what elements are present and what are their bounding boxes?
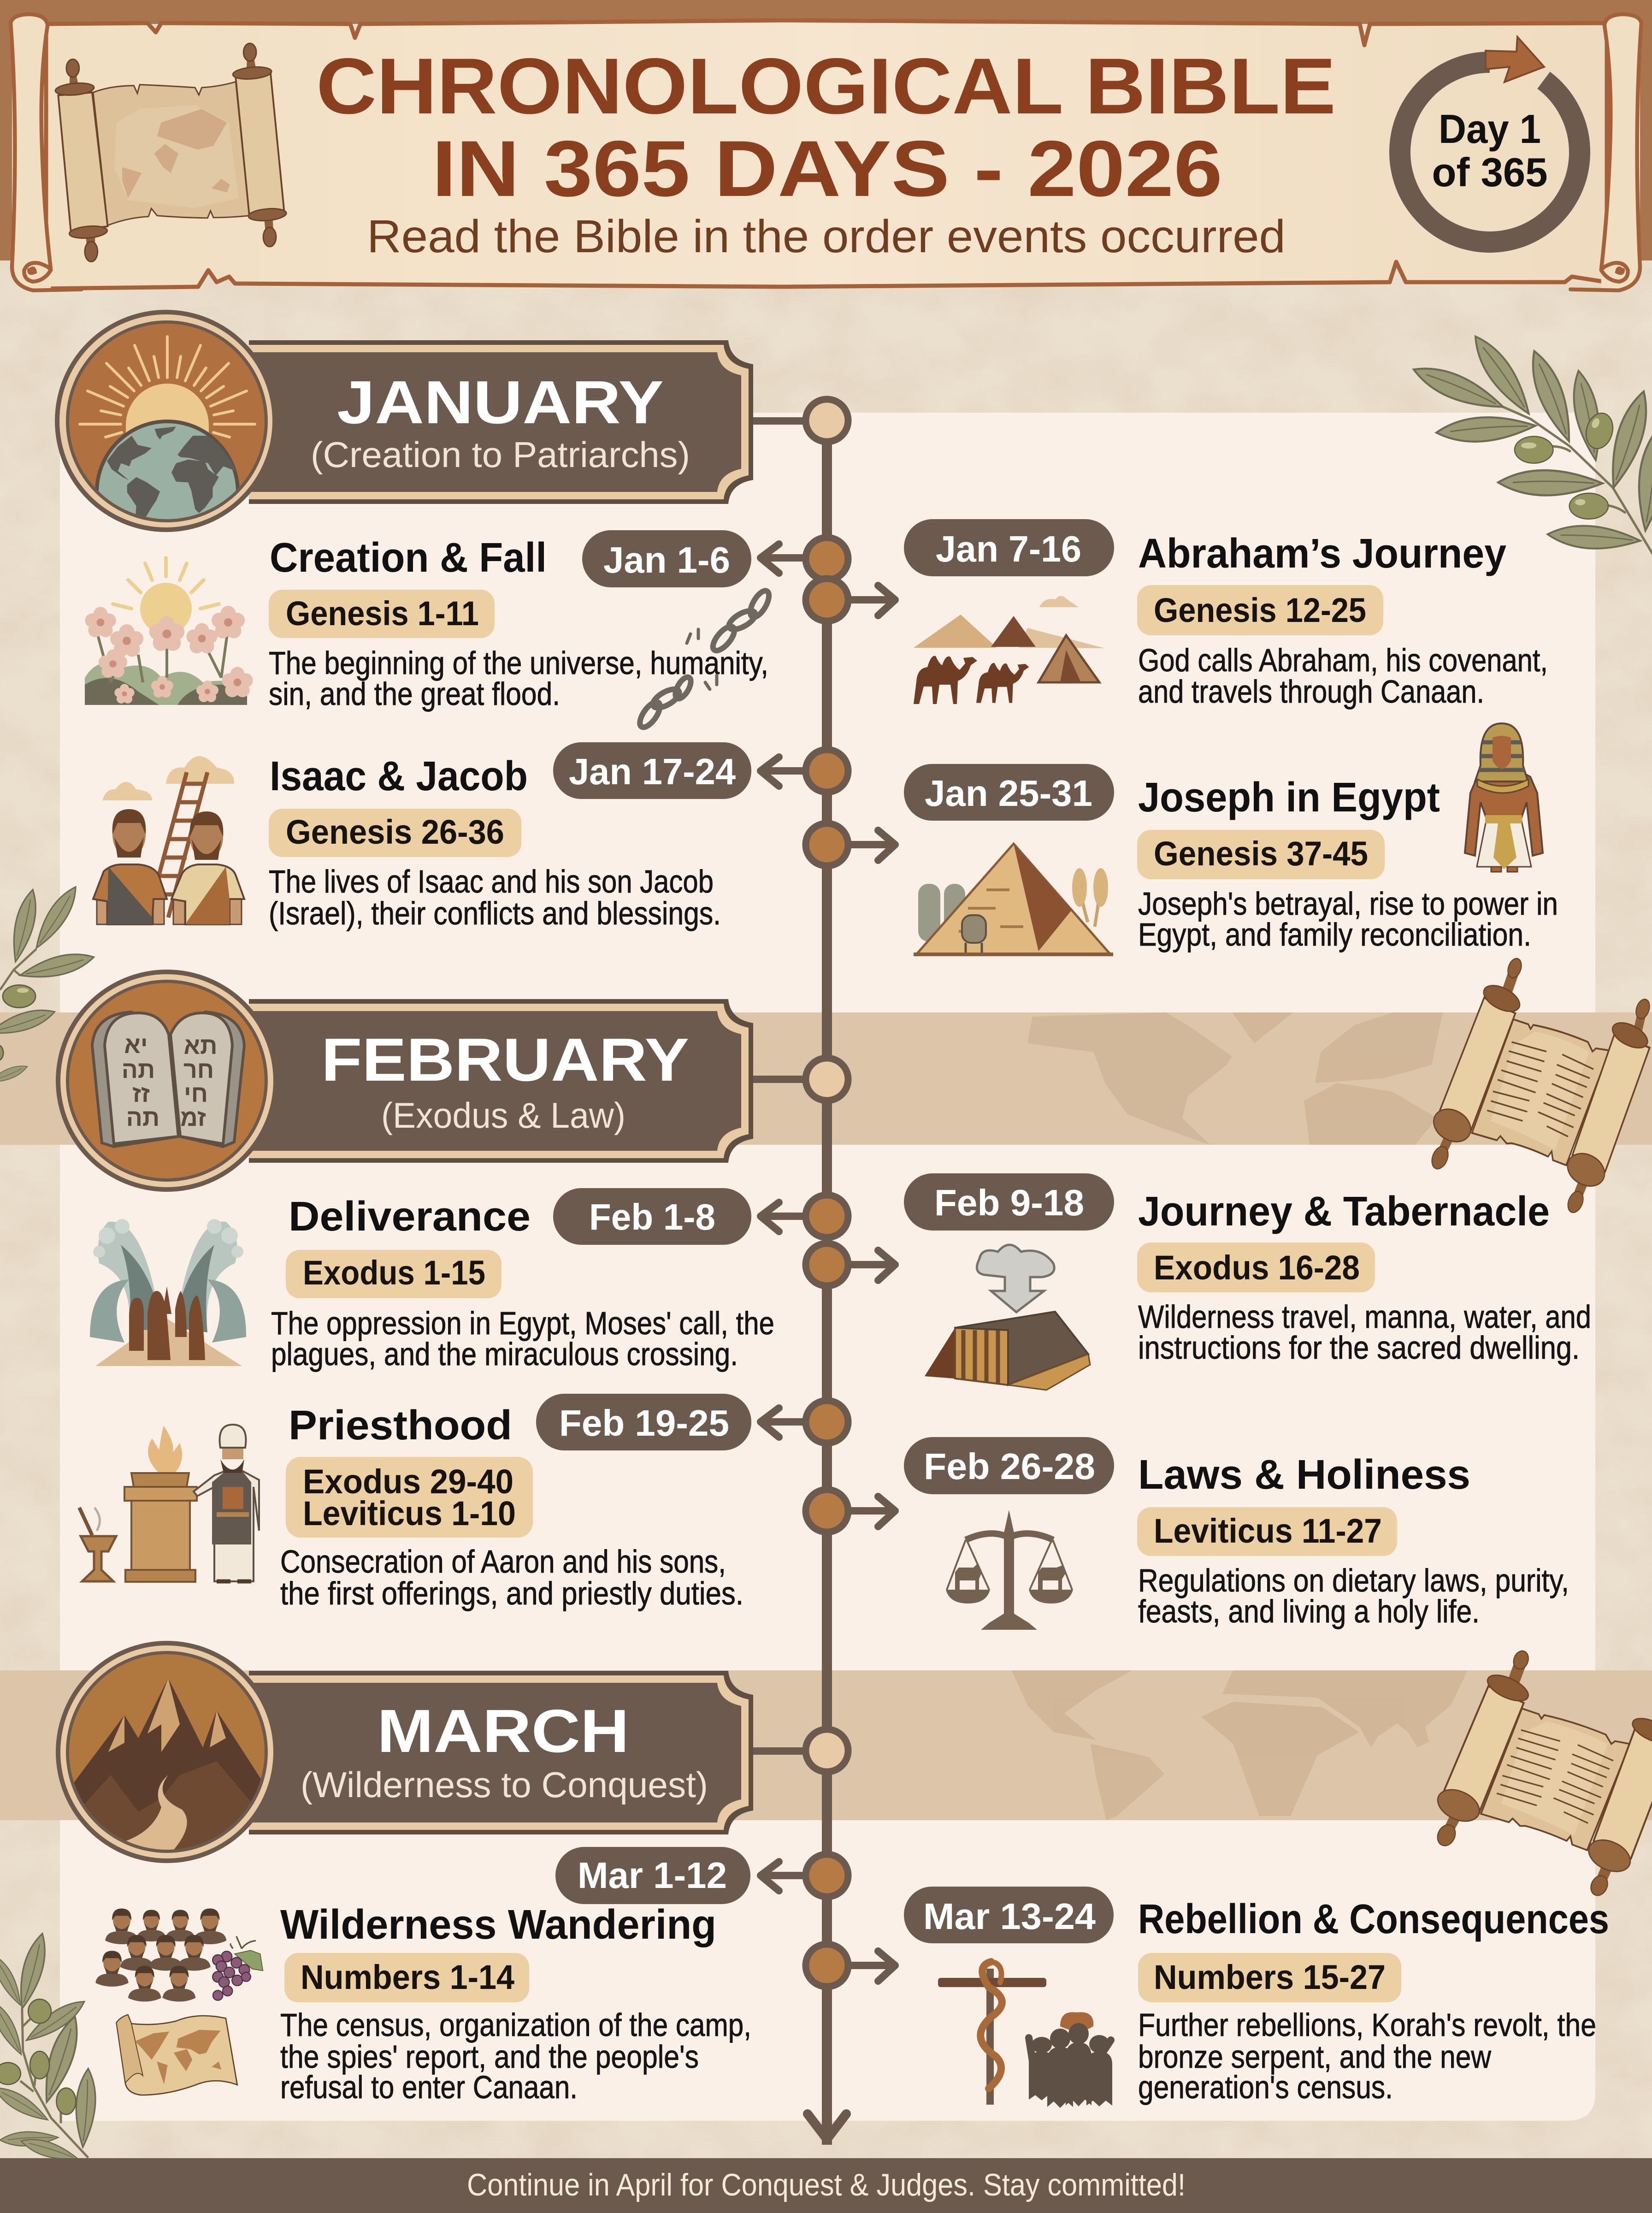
icon: pyramid and granaries [914, 844, 1113, 954]
description: (Israel), their conflicts and blessings. [269, 895, 721, 931]
description [269, 864, 721, 931]
icon: mountains medallion [56, 1641, 278, 1863]
description: The census, organization of the camp, [280, 2007, 751, 2043]
arrow to timeline [761, 750, 848, 792]
heading: Journey & Tabernacle [1138, 1189, 1550, 1235]
date pill: Feb 19-25 [559, 1402, 729, 1444]
icon: parting red sea [90, 1219, 246, 1366]
arrow to timeline [761, 538, 848, 580]
arrow to timeline [761, 1401, 848, 1443]
heading: Laws & Holiness [1138, 1452, 1470, 1498]
description: bronze serpent, and the new [1138, 2039, 1491, 2075]
entry: journey and tabernacle [806, 1173, 1591, 1390]
scripture pill: Exodus 1-15 [303, 1254, 485, 1292]
icon: world map parchment [117, 2015, 237, 2095]
description: Egypt, and family reconciliation. [1138, 917, 1531, 953]
entry: wilderness wandering [95, 1847, 848, 2105]
arrow from timeline [806, 1243, 895, 1286]
date pill [555, 1847, 750, 1904]
date pill [536, 1394, 751, 1450]
plaque [249, 999, 753, 1163]
description: the first offerings, and priestly duties. [280, 1575, 743, 1611]
header scroll banner [0, 0, 1652, 290]
description: Further rebellions, Korah's revolt, the [1138, 2007, 1596, 2043]
entry: isaac and jacob [93, 742, 848, 931]
scripture pill: Leviticus 1-10 [303, 1494, 516, 1533]
icon: balance scales [946, 1510, 1073, 1630]
description: The lives of Isaac and his son Jacob [269, 864, 714, 899]
description: sin, and the great flood. [269, 676, 560, 712]
title: IN 365 DAYS - 2026 [432, 124, 1222, 213]
date pill: Mar 13-24 [923, 1896, 1096, 1937]
day counter: of 365 [1432, 149, 1548, 195]
date pill [904, 1173, 1114, 1231]
description: Consecration of Aaron and his sons, [280, 1544, 726, 1580]
march map band [0, 1670, 1652, 1820]
icon: people and grapes [95, 1908, 263, 2001]
arrow from timeline [806, 1490, 895, 1532]
footer bar [0, 2158, 1652, 2213]
description [280, 2007, 751, 2105]
heading: Joseph in Egypt [1138, 775, 1440, 821]
february header [56, 970, 848, 1192]
date pill: Feb 26-28 [924, 1446, 1095, 1487]
month name: FEBRUARY [321, 1026, 689, 1094]
scripture pill: Genesis 37-45 [1154, 834, 1368, 873]
entry: joseph in egypt [806, 723, 1558, 954]
scripture pill [286, 1457, 533, 1538]
month name: MARCH [377, 1697, 629, 1765]
icon: altar and high priest [79, 1425, 259, 1582]
date pill: Jan 17-24 [569, 751, 736, 792]
olive branch bottom left [0, 1931, 98, 2166]
icon: stone tablets medallion: תה [126, 1105, 159, 1131]
date pill [904, 519, 1114, 576]
icon: rebellious crowd [1029, 2012, 1112, 2108]
date pill: Jan 1-6 [603, 539, 730, 580]
scripture pill: Genesis 26-36 [286, 813, 504, 851]
icon: garden sunrise [85, 558, 253, 705]
month node [806, 1729, 848, 1772]
month theme: (Wilderness to Conquest) [301, 1764, 708, 1805]
entry: creation and fall [85, 530, 848, 730]
icon: stone tablets medallion: תה [122, 1057, 155, 1083]
title: CHRONOLOGICAL BIBLE [316, 42, 1336, 130]
month theme: (Exodus & Law) [381, 1095, 625, 1136]
heading: Deliverance [289, 1194, 531, 1240]
month node [806, 1058, 848, 1101]
heading: Creation & Fall [270, 535, 547, 581]
icon: cloud pillar and tabernacle [925, 1245, 1090, 1390]
icon: stone tablets medallion: חי [184, 1081, 208, 1107]
description: feasts, and living a holy life. [1138, 1593, 1480, 1629]
arrow from timeline [806, 579, 895, 621]
description [1138, 1562, 1569, 1629]
icon: stone tablets medallion [56, 970, 278, 1192]
description [271, 1305, 774, 1372]
entry: laws and holiness [806, 1437, 1569, 1630]
description: and travels through Canaan. [1138, 674, 1484, 710]
subtitle: Read the Bible in the order events occurred [367, 211, 1286, 262]
month name: JANUARY [337, 368, 664, 436]
icon: stone tablets medallion: תא [184, 1033, 217, 1059]
arrow from timeline [806, 1944, 895, 1987]
olive branch top right [1409, 330, 1652, 556]
date pill [904, 1887, 1114, 1943]
scripture pill: Numbers 15-27 [1154, 1958, 1386, 1996]
arrow to timeline [761, 1195, 848, 1237]
heading: Abraham’s Journey [1138, 531, 1506, 577]
olive branch left [0, 882, 96, 1087]
entry: priesthood [79, 1394, 848, 1611]
day counter [1400, 37, 1580, 242]
description: Joseph's betrayal, rise to power in [1138, 886, 1558, 922]
title [316, 42, 1336, 213]
entry: abraham's journey [806, 519, 1548, 710]
description: refusal to enter Canaan. [280, 2069, 578, 2105]
date pill: Feb 9-18 [934, 1182, 1084, 1223]
icon: stone tablets medallion: זמ [180, 1105, 206, 1131]
date pill: Jan 25-31 [925, 773, 1092, 814]
description: The beginning of the universe, humanity, [269, 645, 768, 681]
icon: parchment map scroll [55, 43, 287, 261]
month theme: (Creation to Patriarchs) [311, 434, 690, 475]
icon: jacob's ladder and two men [93, 756, 244, 924]
date pill [553, 742, 751, 799]
description: God calls Abraham, his covenant, [1138, 642, 1548, 678]
plaque [249, 1671, 753, 1834]
icon: desert camels and tents [914, 596, 1105, 704]
heading: Isaac & Jacob [270, 753, 528, 799]
arrow to timeline [761, 1854, 848, 1897]
icon: march torah scroll [1433, 1649, 1652, 1898]
description [280, 1544, 743, 1611]
date pill [904, 764, 1114, 821]
icon: february torah scroll [1425, 947, 1652, 1225]
january header [55, 310, 848, 562]
date pill: Mar 1-12 [578, 1855, 727, 1896]
heading: Priesthood [289, 1402, 512, 1449]
plaque [249, 340, 753, 504]
description: plagues, and the miraculous crossing. [271, 1336, 738, 1372]
description: generation's census. [1138, 2069, 1393, 2105]
icon: broken chain [636, 588, 773, 730]
day counter: Day 1 [1439, 106, 1541, 152]
scripture pill: Leviticus 11-27 [1154, 1512, 1382, 1550]
date pill: Feb 1-8 [589, 1196, 715, 1237]
entry: deliverance [90, 1188, 848, 1372]
heading: Wilderness Wandering [280, 1902, 716, 1948]
icon: stone tablets medallion: יא [124, 1032, 148, 1059]
connector to node [751, 417, 811, 425]
description [1138, 642, 1548, 710]
date pill [904, 1437, 1114, 1494]
scripture pill: Numbers 1-14 [301, 1958, 514, 1996]
connector to node [751, 1747, 811, 1755]
month node [806, 399, 848, 442]
icon: stone tablets medallion: חר [183, 1057, 214, 1083]
description: Regulations on dietary laws, purity, [1138, 1562, 1569, 1598]
icon: pharaoh [1465, 723, 1543, 872]
footer bar: Continue in April for Conquest & Judges. Stay committed! [467, 2167, 1186, 2202]
description: The oppression in Egypt, Moses' call, the [271, 1305, 774, 1341]
description [1138, 1299, 1591, 1366]
connector to node [751, 1076, 811, 1083]
description [1138, 886, 1558, 953]
icon: bronze serpent on pole [938, 1962, 1046, 2105]
content panel [60, 413, 1595, 2121]
description [269, 645, 768, 712]
icon: stone tablets medallion: זז [132, 1081, 150, 1107]
date pill: Jan 7-16 [936, 528, 1081, 569]
date pill [553, 1188, 751, 1245]
february map band [0, 1012, 1652, 1145]
march header [56, 1641, 848, 1863]
scripture pill: Exodus 16-28 [1154, 1249, 1360, 1287]
entry: rebellion and consequences [806, 1887, 1609, 2108]
description [1138, 2007, 1596, 2105]
description: the spies' report, and the people's [280, 2039, 699, 2075]
scripture pill: Exodus 29-40 [303, 1462, 513, 1501]
arrow from timeline [806, 823, 895, 866]
scripture pill: Genesis 1-11 [286, 594, 479, 633]
description: instructions for the sacred dwelling. [1138, 1330, 1580, 1366]
timeline spine [808, 420, 846, 2145]
icon: sun and globe medallion [55, 310, 272, 532]
date pill [582, 530, 751, 587]
scripture pill: Genesis 12-25 [1154, 591, 1366, 629]
